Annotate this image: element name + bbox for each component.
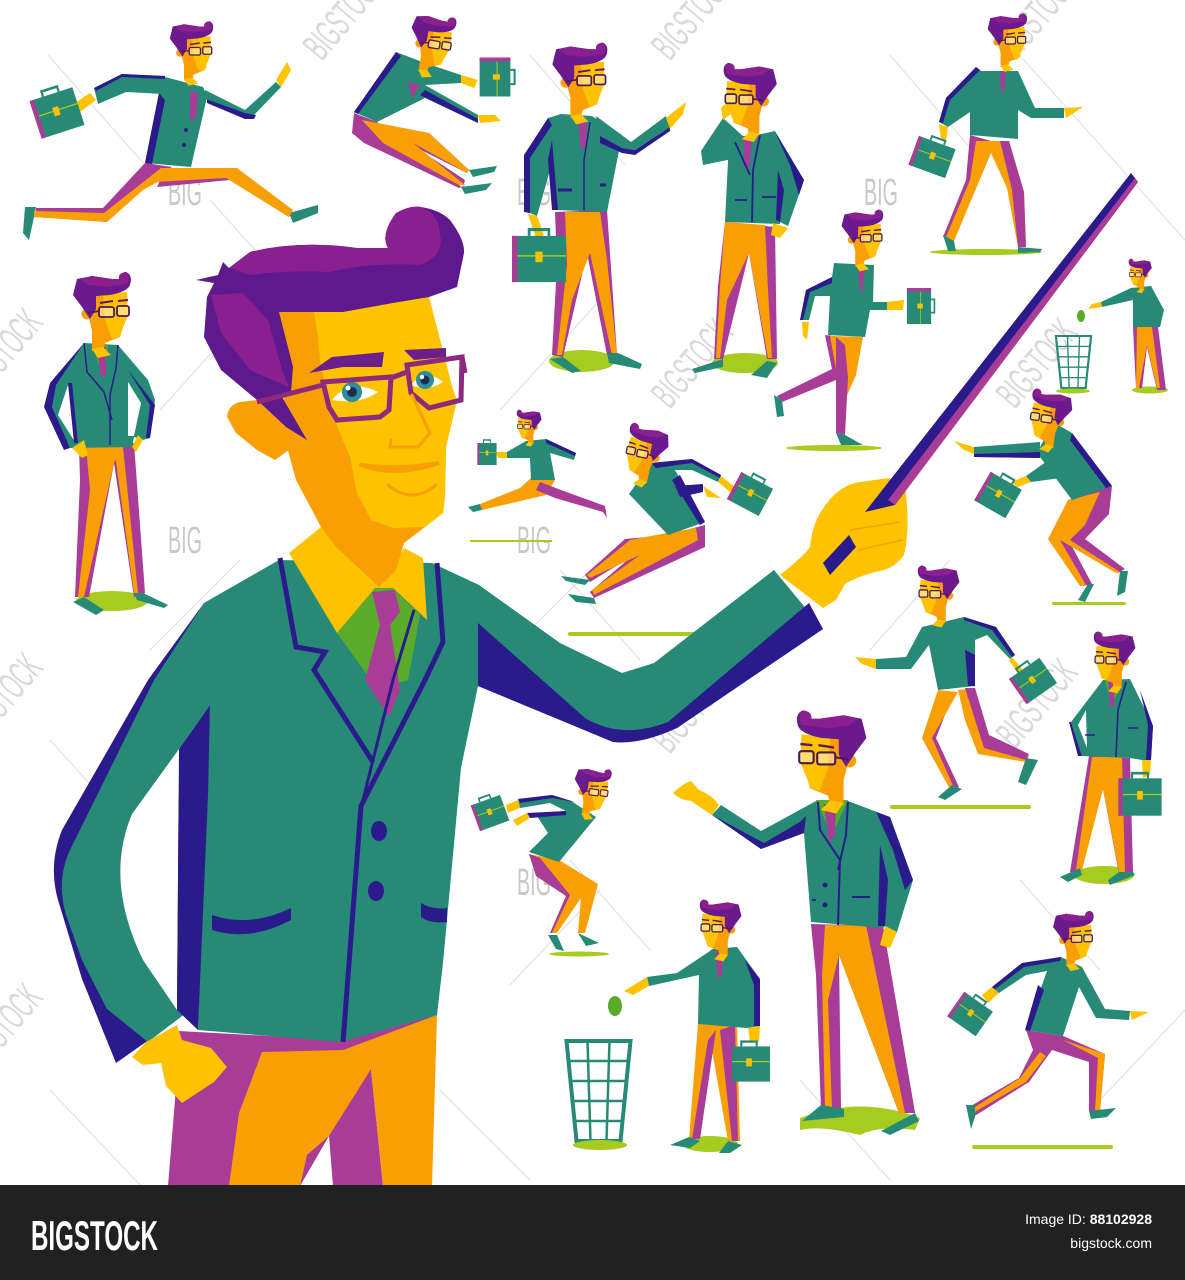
watermark pattern: BIG [864,862,898,904]
watermark pattern: BIGSTOCK [643,656,741,761]
watermark pattern: BIG [517,520,551,562]
figure: crouching with case [469,765,612,956]
watermark pattern: BIG [168,862,202,904]
lapel lines and buttons [212,558,447,1042]
glasses [257,357,465,420]
figure: jumping forward with briefcase [352,11,515,194]
figure: running left with case [855,565,1057,809]
image id: Image ID: 88102928 [1025,1211,1152,1227]
figure: standing hands in pockets [44,272,168,615]
watermark pattern: BIG [517,862,551,904]
figure: running lower right with case [947,911,1149,1149]
eyebrows [309,348,446,373]
watermark pattern: BIGSTOCK [988,311,1086,416]
main jacket [62,560,823,1042]
watermark pattern: BIG [864,172,898,214]
hair [196,207,464,440]
collar [289,527,427,633]
figure: small runner [468,410,607,542]
figure: leaping with briefcase [23,21,318,240]
figure: bending forward [954,388,1128,605]
main underarm shadow [478,603,823,742]
figure: walking with briefcase [908,13,1083,255]
figure: diving forward [561,422,775,636]
nose and mouth [361,395,439,495]
main body gap [120,749,179,1010]
footer logo: BIGSTOCK [31,1212,158,1259]
watermark pattern: BIG [168,172,202,214]
watermark pattern: BIG [517,172,551,214]
icon: small trash bin [1056,336,1091,394]
site address: bigstock.com [1070,1235,1152,1251]
eyes [332,371,443,402]
icon: large trash bin with leaf [566,996,630,1150]
ear [227,400,293,460]
figure: standing right with case [1060,631,1162,885]
pointer [823,173,1138,575]
figure: jogging with briefcase held out [774,209,934,451]
figure: small throwing leaf [1077,259,1168,394]
face [314,297,457,528]
main character with pointer [54,173,1138,1186]
watermark pattern: BIGSTOCK [643,311,741,416]
shirt and tie [337,588,420,717]
figure: standing with large briefcase [512,43,686,373]
watermark pattern: BIGSTOCK [988,651,1086,756]
main sleeve shadow [54,603,210,1063]
main inner shadow [177,705,210,1030]
figure: large presenting figure [673,710,920,1135]
watermark pattern: BIG [168,520,202,562]
hand holding pointer [780,478,908,608]
watermark pattern: BIG [864,520,898,562]
figure: throwing leaf in bin [624,899,770,1153]
neck and face shadow [279,297,457,587]
fist on hip [132,1025,227,1103]
footer bar [0,1185,1185,1280]
figure: talking on phone [692,63,804,378]
main pants [168,1015,437,1186]
